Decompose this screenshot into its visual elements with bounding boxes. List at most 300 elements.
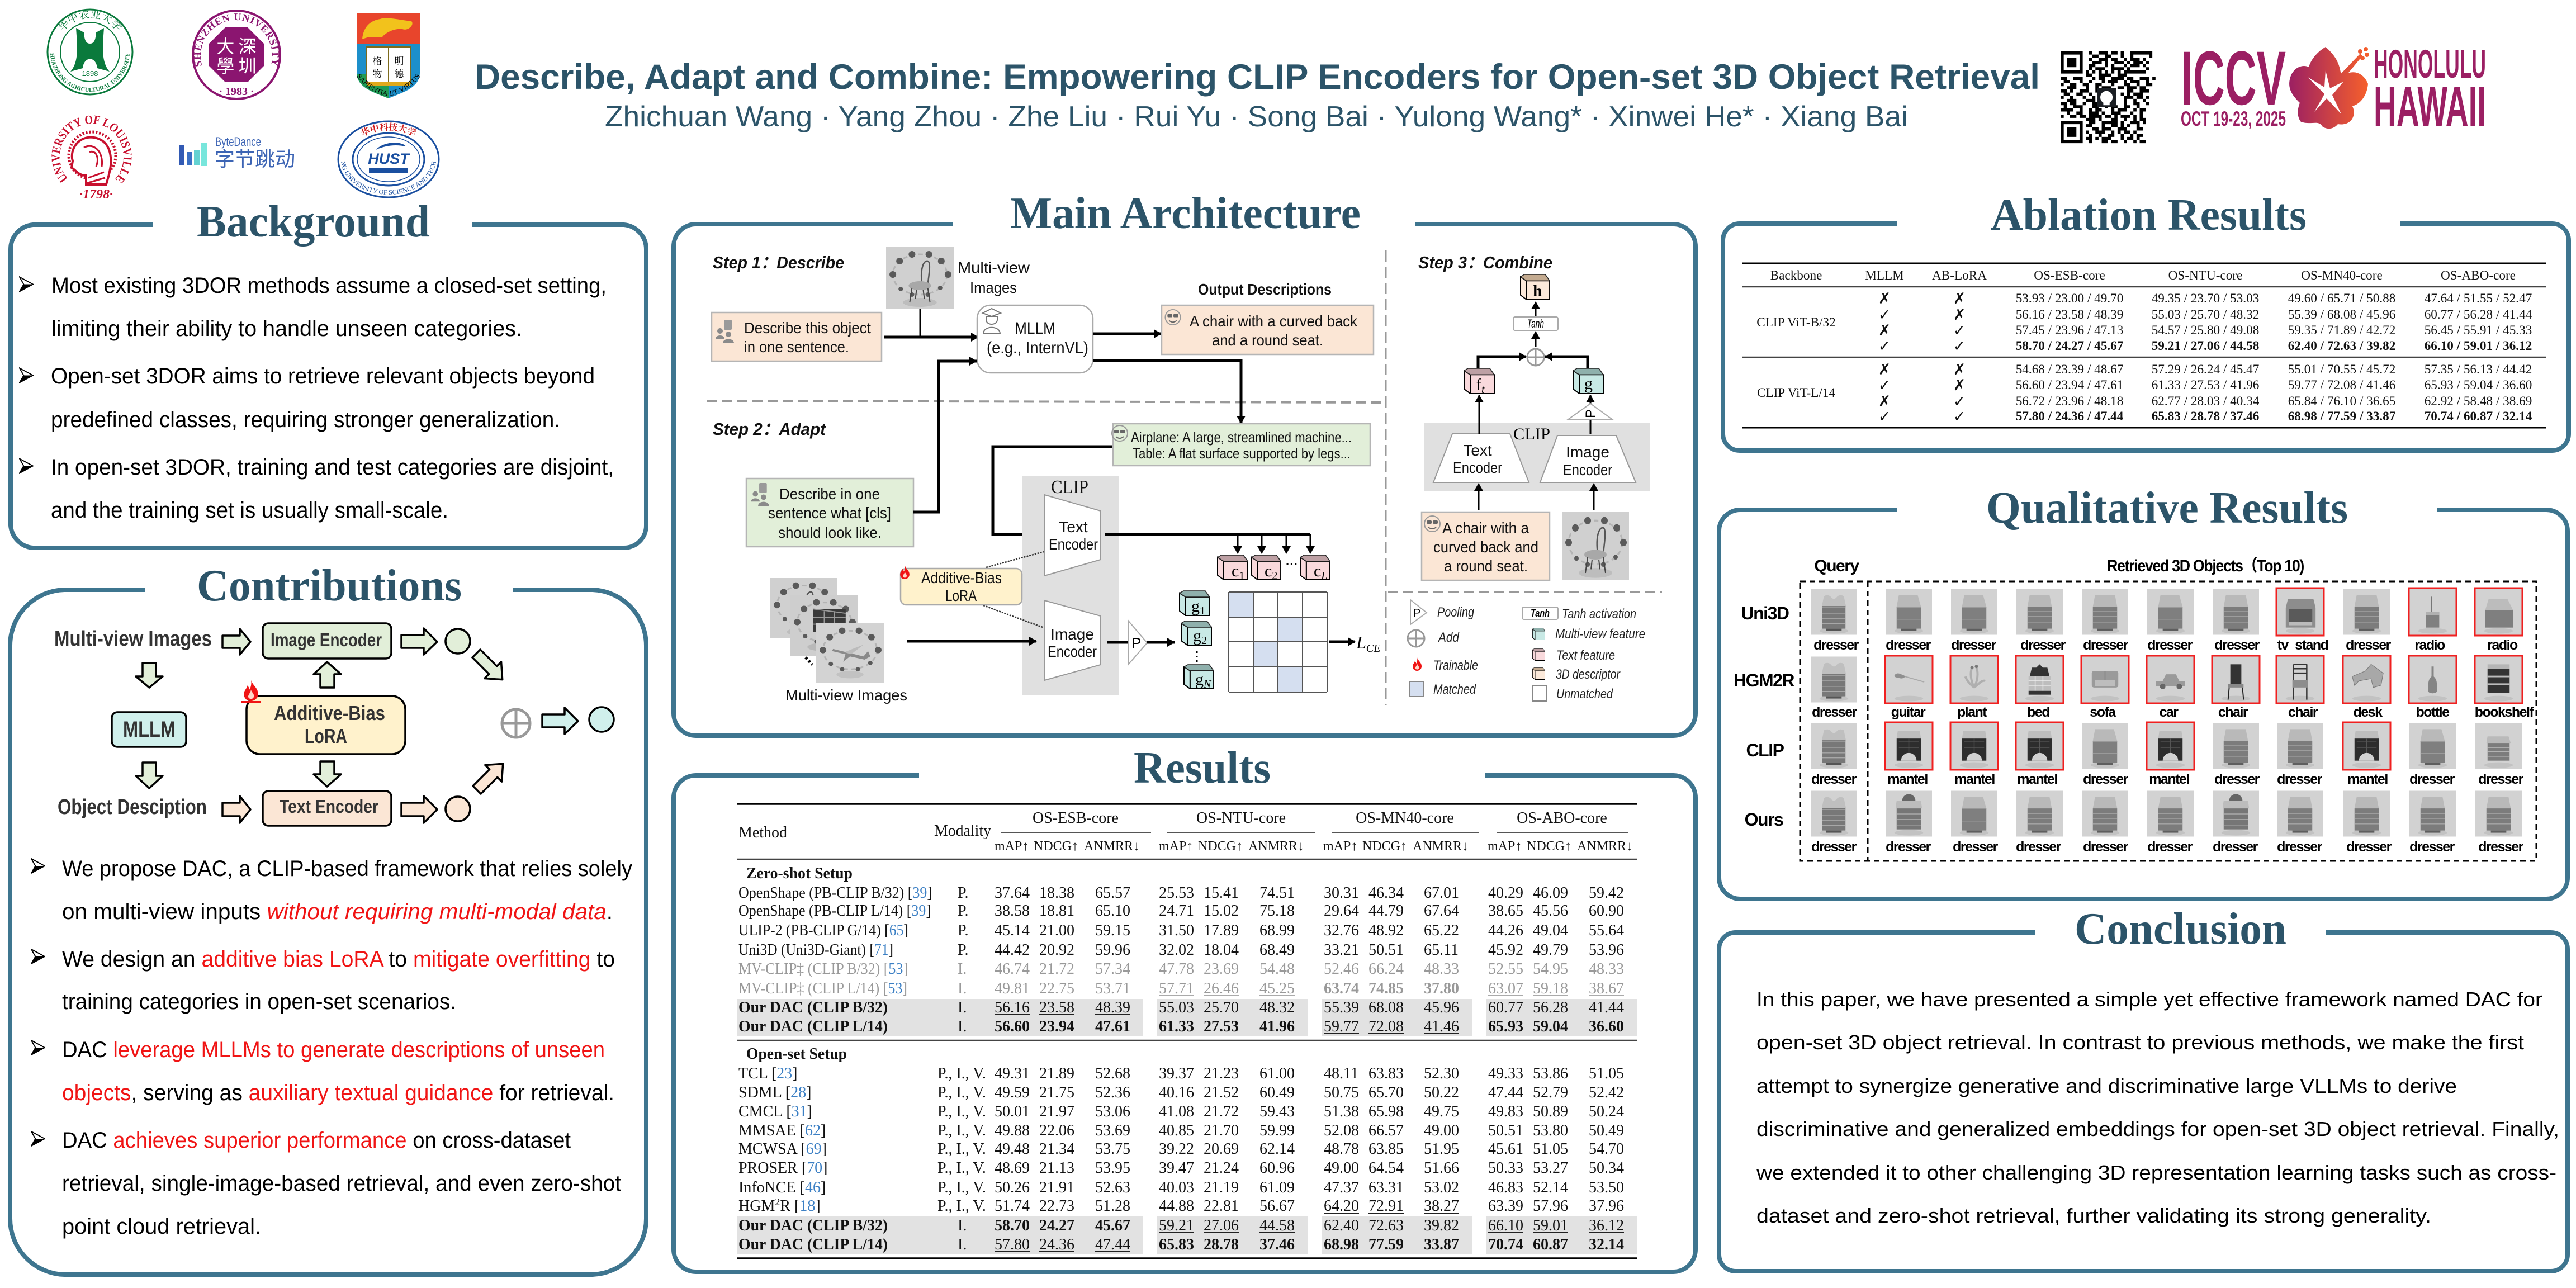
table section: zero-shot setup: 46.34 xyxy=(1368,884,1404,902)
table section: open-set setup: 64.54 xyxy=(1368,1159,1404,1177)
table section: zero-shot setup: 38.65 xyxy=(1488,902,1523,920)
table section: zero-shot setup: I. xyxy=(958,960,967,978)
box: description: A chair with a xyxy=(1442,519,1529,537)
table section: open-set setup: 53.02 xyxy=(1424,1179,1459,1196)
step 3: combine: Step 3：Combine xyxy=(1418,253,1552,272)
table section: zero-shot setup: 48.39 xyxy=(1095,999,1130,1016)
row: Ours: dresser xyxy=(2083,839,2129,855)
table section: open-set setup: 21.70 xyxy=(1204,1122,1239,1139)
table section: zero-shot setup: 63.07 xyxy=(1488,980,1523,997)
step 1: describe xyxy=(712,247,1374,423)
table section: open-set setup: 50.33 xyxy=(1488,1159,1523,1177)
row: HGM2R: dresser xyxy=(1812,704,1858,720)
text block: contribution 4 xyxy=(31,1128,621,1239)
table section: open-set setup: 20.69 xyxy=(1204,1140,1239,1158)
table section: open-set setup: 72.63 xyxy=(1368,1217,1404,1234)
table section: open-set setup: P., I., V. xyxy=(937,1197,986,1215)
table section: open-set setup: 21.97 xyxy=(1039,1103,1074,1120)
table: ablation: 57.29 / 26.24 / 45.47 xyxy=(2152,362,2259,377)
table: ablation: 59.35 / 71.89 / 42.72 xyxy=(2288,323,2395,338)
table section: open-set setup: 62.14 xyxy=(1259,1140,1295,1158)
table section: open-set setup: Our DAC (CLIP B/32) xyxy=(738,1217,888,1234)
legend: Trainable xyxy=(1433,658,1478,673)
table section: open-set setup: 59.01 xyxy=(1533,1217,1568,1234)
row: HGM2R: chair xyxy=(2218,704,2248,720)
table section: open-set setup: 52.63 xyxy=(1095,1179,1130,1196)
cubes: image features g xyxy=(1180,591,1214,690)
table section: zero-shot setup: 45.14 xyxy=(995,922,1030,939)
table header: ANMRR↓ xyxy=(1577,839,1633,854)
legend: Pooling xyxy=(1437,605,1475,620)
table section: open-set setup: 50.49 xyxy=(1589,1122,1624,1139)
figure: retrieval grid: Retrieved 3D Objects（Top 10) xyxy=(2107,557,2304,575)
table section: open-set setup: 48.69 xyxy=(995,1159,1030,1177)
table: ablation: 54.57 / 25.80 / 49.08 xyxy=(2152,323,2259,338)
row: Uni3D: dresser xyxy=(1813,637,1859,653)
cubes: image features g: g xyxy=(1191,597,1200,615)
box: CLIP xyxy=(1424,423,1650,491)
text block: contribution 3: DAC leverage MLLMs to generate descriptions of unseen xyxy=(62,1038,605,1062)
table section: open-set setup: 53.50 xyxy=(1589,1179,1624,1196)
table: ablation: ✓ xyxy=(1878,377,1891,394)
table: ablation: 57.35 / 56.13 / 44.42 xyxy=(2425,362,2532,377)
table section: zero-shot setup: I. xyxy=(958,1018,967,1035)
logo: Shenzhen University: SHENZHEN UNIVERSITY xyxy=(194,13,279,67)
image: multi-view stack: Multi-view Images xyxy=(785,686,907,704)
table section: open-set setup: R [ xyxy=(780,1197,799,1215)
row: Ours: dresser xyxy=(2213,839,2258,855)
table section: zero-shot setup: 59.15 xyxy=(1095,922,1130,939)
table: ablation: 56.72 / 23.96 / 48.18 xyxy=(2016,394,2123,409)
table section: zero-shot setup: 68.99 xyxy=(1259,922,1295,939)
box: CLIP: Encoder xyxy=(1563,461,1612,479)
box: class prompt: sentence what [cls] xyxy=(768,504,891,522)
table section: open-set setup: 45.61 xyxy=(1488,1140,1523,1158)
box: CLIP encoders xyxy=(1022,476,1119,695)
table section: open-set setup: P., I., V. xyxy=(937,1179,986,1196)
table section: zero-shot setup: 56.60 xyxy=(995,1018,1030,1035)
panel: Ablation Results xyxy=(1723,191,2569,451)
table section: open-set setup: 40.85 xyxy=(1159,1122,1194,1139)
table header: NDCG↑ xyxy=(1198,839,1243,854)
table section: open-set setup: 50.34 xyxy=(1589,1159,1624,1177)
table section: open-set setup: 18] xyxy=(799,1197,821,1215)
box: CLIP encoders: Text xyxy=(1059,518,1088,536)
table: ablation: 65.93 / 59.04 / 36.60 xyxy=(2425,378,2532,392)
table section: open-set setup: 22.81 xyxy=(1204,1197,1239,1215)
row: HGM2R: plant xyxy=(1957,704,1987,720)
text block: bullet 1: Most existing 3DOR methods assume a closed-set setting, xyxy=(51,273,607,298)
image: multi-view stack xyxy=(770,578,907,704)
row: HGM2R: car xyxy=(2159,704,2179,720)
table: ablation: OS-ESB-core xyxy=(2034,268,2105,283)
step 2: adapt: Step 2：Adapt xyxy=(713,419,827,439)
table: ablation: ✗ xyxy=(1953,377,1966,394)
matrix: similarity grid xyxy=(1229,592,1327,692)
dashed separators xyxy=(707,401,1383,402)
logo: ByteDance: 字节跳动 xyxy=(215,148,295,171)
table section: open-set setup: 47.44 xyxy=(1488,1084,1523,1101)
table section: zero-shot setup: 33.21 xyxy=(1324,941,1359,959)
table section: zero-shot setup: 49.81 xyxy=(995,980,1030,997)
table header: OS-ABO-core xyxy=(1517,809,1607,827)
text block: contribution 2 xyxy=(31,947,615,1014)
table section: zero-shot setup: 44.26 xyxy=(1488,922,1523,939)
text block: contribution 2: training categories in open-set scenarios. xyxy=(62,989,456,1014)
table section: open-set setup: 21.34 xyxy=(1039,1140,1074,1158)
table section: zero-shot setup: MV-CLIP‡ (CLIP L/14) [53] xyxy=(738,980,907,997)
table section: zero-shot setup: 67.64 xyxy=(1424,902,1459,920)
row: CLIP: dresser xyxy=(2214,771,2260,787)
row: Ours xyxy=(1811,790,2524,855)
table section: zero-shot setup: 68.08 xyxy=(1368,999,1404,1016)
table section: open-set setup: CMCL [31] xyxy=(738,1103,812,1120)
table section: zero-shot setup: 26.46 xyxy=(1204,980,1239,997)
diagram: contribution pipeline: LoRA xyxy=(305,724,347,747)
table section: zero-shot setup: 41.46 xyxy=(1424,1018,1459,1035)
legend: Matched xyxy=(1433,682,1476,697)
table section: open-set setup: 50.01 xyxy=(995,1103,1030,1120)
label: cross-entropy loss: L xyxy=(1356,632,1366,652)
table: results xyxy=(737,804,1637,1258)
table section: open-set setup: 63.31 xyxy=(1368,1179,1404,1196)
table section: open-set setup: Open-set Setup xyxy=(746,1045,847,1063)
table section: open-set setup: 72.91 xyxy=(1368,1197,1404,1215)
logo: Shenzhen University: · 1983 · xyxy=(219,86,254,98)
table section: open-set setup: 51.28 xyxy=(1095,1197,1130,1215)
table section: open-set setup: I. xyxy=(958,1217,967,1234)
table section: open-set setup: 53.69 xyxy=(1095,1122,1130,1139)
cubes: image features g: g xyxy=(1193,627,1201,645)
box: Tanh: Tanh xyxy=(1527,318,1544,330)
table section: open-set setup: 48.11 xyxy=(1324,1065,1358,1082)
table section: open-set setup: 39.22 xyxy=(1159,1140,1194,1158)
table: ablation: 54.68 / 23.39 / 48.67 xyxy=(2016,362,2123,377)
table section: open-set setup: 65.70 xyxy=(1368,1084,1404,1101)
table section: open-set setup: 33.87 xyxy=(1424,1236,1459,1253)
table section: zero-shot setup: 65.22 xyxy=(1424,922,1459,939)
table section: zero-shot setup: 54.48 xyxy=(1259,960,1295,978)
row: HGM2R: bottle xyxy=(2416,704,2450,720)
box: MLLM xyxy=(977,305,1093,373)
box: CLIP encoders: CLIP xyxy=(1051,477,1088,498)
row: Uni3D: dresser xyxy=(2214,637,2260,653)
panel: Conclusion xyxy=(1719,905,2568,1271)
table: ablation: ✓ xyxy=(1953,393,1966,410)
logo: University of Louisville: UNIVERSITY OF LOUISVILLE xyxy=(51,115,132,183)
legend xyxy=(1408,600,1645,702)
table: ablation: ✗ xyxy=(1953,290,1966,307)
table section: open-set setup: 27.06 xyxy=(1204,1217,1239,1234)
table: ablation: ✗ xyxy=(1878,393,1891,410)
table section: open-set setup: 66.57 xyxy=(1368,1122,1404,1139)
table: ablation: ✓ xyxy=(1878,408,1891,425)
table: ablation: 59.21 / 27.06 / 44.58 xyxy=(2152,339,2259,353)
table header: NDCG↑ xyxy=(1527,839,1571,854)
table section: open-set setup: 52.79 xyxy=(1533,1084,1568,1101)
table section: open-set setup: 44.88 xyxy=(1159,1197,1194,1215)
table section: open-set setup: 50.51 xyxy=(1488,1122,1523,1139)
table section: open-set setup: P., I., V. xyxy=(937,1122,986,1139)
table section: open-set setup: 59.21 xyxy=(1159,1217,1194,1234)
logo: ICCV Honolulu Hawaii xyxy=(2181,36,2486,138)
table section: open-set setup: 50.89 xyxy=(1533,1103,1568,1120)
table: ablation: 62.92 / 58.48 / 38.69 xyxy=(2425,394,2532,409)
cubes: text features c: c xyxy=(1314,562,1321,580)
table section: zero-shot setup: 60.77 xyxy=(1488,999,1523,1016)
logo: ICCV Honolulu Hawaii: ICCV xyxy=(2181,36,2286,121)
table: ablation: ✓ xyxy=(1953,322,1966,339)
table section: zero-shot setup: 22.75 xyxy=(1039,980,1074,997)
table section: open-set setup: MMSAE [62] xyxy=(738,1122,826,1139)
cube: f_t: f xyxy=(1476,376,1481,394)
table: ablation: ✗ xyxy=(1878,322,1891,339)
row: HGM2R xyxy=(1811,656,2534,720)
table section: zero-shot setup: 52.55 xyxy=(1488,960,1523,978)
logo: ByteDance: ByteDance xyxy=(215,135,261,149)
table section: open-set setup: 52.68 xyxy=(1095,1065,1130,1082)
table section: open-set setup: P., I., V. xyxy=(937,1159,986,1177)
table header: Method xyxy=(738,824,787,841)
table: ablation: Backbone xyxy=(1770,268,1822,283)
table section: zero-shot setup: 38.67 xyxy=(1589,980,1624,997)
table header: ANMRR↓ xyxy=(1413,839,1469,854)
box: describe prompt: Describe this object xyxy=(744,319,871,337)
box: class descriptions xyxy=(1112,424,1370,466)
step 1: describe: Images xyxy=(970,279,1017,296)
table section: open-set setup: 51.95 xyxy=(1424,1140,1459,1158)
table header: mAP↑ xyxy=(1323,839,1357,854)
panel: Main Architecture xyxy=(674,189,1696,736)
label: cross-entropy loss: CE xyxy=(1366,642,1380,655)
row: Uni3D: dresser xyxy=(2346,637,2392,653)
table section: open-set setup: 49.88 xyxy=(995,1122,1030,1139)
table section: zero-shot setup: 47.61 xyxy=(1095,1018,1130,1035)
row: CLIP: mantel xyxy=(1954,771,1995,787)
table section: zero-shot setup: 61.33 xyxy=(1159,1018,1194,1035)
table section: open-set setup: 21.91 xyxy=(1039,1179,1074,1196)
table section: open-set setup: 49.00 xyxy=(1424,1122,1459,1139)
table header: ANMRR↓ xyxy=(1248,839,1304,854)
table: ablation: 55.01 / 70.55 / 45.72 xyxy=(2288,362,2395,377)
logo: Huazhong Agricultural University: HUAZHONG AGRICULTURAL UNIVERSITY xyxy=(50,53,130,92)
table section: zero-shot setup: 45.56 xyxy=(1533,902,1568,920)
table section: zero-shot setup: 41.44 xyxy=(1589,999,1624,1016)
table: ablation: OS-NTU-core xyxy=(2168,268,2242,283)
logo: Huazhong Agricultural University: 1898 xyxy=(82,69,98,78)
text block: contribution 1: on multi-view inputs without requiring multi-modal data. xyxy=(62,899,613,924)
text block: contribution 3 xyxy=(31,1038,614,1105)
table section: open-set setup: 68.98 xyxy=(1324,1236,1359,1253)
table section: zero-shot setup: P. xyxy=(958,922,968,939)
cube: f_t: t xyxy=(1481,383,1485,396)
table section: open-set setup: 40.03 xyxy=(1159,1179,1194,1196)
table section: open-set setup: 63.85 xyxy=(1368,1140,1404,1158)
table section: open-set setup: 48.78 xyxy=(1324,1140,1359,1158)
table section: open-set setup: 62.40 xyxy=(1324,1217,1359,1234)
text block: contribution 4: retrieval, single-image-based retrieval, and even zero-shot xyxy=(62,1171,621,1196)
table section: open-set setup: 21.89 xyxy=(1039,1065,1074,1082)
panel: Results xyxy=(674,744,1696,1272)
legend: Add xyxy=(1437,630,1460,645)
table section: zero-shot setup: 41.96 xyxy=(1259,1018,1295,1035)
table section: zero-shot setup: OpenShape (PB-CLIP B/32) [39] xyxy=(738,884,932,902)
table header: mAP↑ xyxy=(995,839,1029,854)
table section: zero-shot setup: 25.53 xyxy=(1159,884,1194,902)
table section: zero-shot setup: 32.76 xyxy=(1324,922,1359,939)
heading: Main Architecture: Main Architecture xyxy=(1010,189,1361,238)
table header: NDCG↑ xyxy=(1034,839,1078,854)
table section: open-set setup: 21.75 xyxy=(1039,1084,1074,1101)
table section: open-set setup: 51.05 xyxy=(1533,1140,1568,1158)
table section: open-set setup: Our DAC (CLIP L/14) xyxy=(738,1236,888,1253)
row: HGM2R: desk xyxy=(2354,704,2383,720)
table section: open-set setup: 53.75 xyxy=(1095,1140,1130,1158)
logo: University of Hong Kong: 物 xyxy=(372,66,382,80)
table: ablation: OS-MN40-core xyxy=(2301,268,2383,283)
step 3: combine xyxy=(1418,253,1650,580)
text block: contribution 1 xyxy=(31,856,632,924)
text block: contribution 4: DAC achieves superior performance on cross-dataset xyxy=(62,1128,571,1153)
box: CLIP encoders: Encoder xyxy=(1049,536,1098,553)
table section: zero-shot setup: Our DAC (CLIP B/32) xyxy=(738,999,888,1016)
figure: retrieval grid xyxy=(1734,557,2536,861)
table: ablation: ✗ xyxy=(1878,290,1891,307)
icon: hibiscus flower xyxy=(2289,47,2369,129)
table section: open-set setup: 39.47 xyxy=(1159,1159,1194,1177)
table section: open-set setup: 54.70 xyxy=(1589,1140,1624,1158)
table section: zero-shot setup: OpenShape (PB-CLIP L/14) [39] xyxy=(738,902,931,920)
table section: open-set setup: 44.58 xyxy=(1259,1217,1295,1234)
table section: open-set setup: 53.80 xyxy=(1533,1122,1568,1139)
table section: open-set setup: 39.82 xyxy=(1424,1217,1459,1234)
table section: open-set setup: 53.86 xyxy=(1533,1065,1568,1082)
table section: zero-shot setup: 74.51 xyxy=(1259,884,1295,902)
panel: Contributions xyxy=(10,561,646,1275)
cube: g: g xyxy=(1584,375,1593,393)
logo: Huazhong University of Science and Technology: 华中科技大学 xyxy=(361,122,416,136)
table section: zero-shot setup: 55.39 xyxy=(1324,999,1359,1016)
table section: zero-shot setup: 74.85 xyxy=(1368,980,1404,997)
box: describe prompt: in one sentence. xyxy=(744,338,849,356)
table section: zero-shot setup: 49.79 xyxy=(1533,941,1568,959)
table: ablation: 57.80 / 24.36 / 47.44 xyxy=(2016,409,2124,424)
row: Uni3D: dresser xyxy=(2083,637,2129,653)
table section: zero-shot setup: P. xyxy=(958,941,968,959)
table section: open-set setup: 51.66 xyxy=(1424,1159,1459,1177)
table section: zero-shot setup: 53.96 xyxy=(1589,941,1624,959)
table section: open-set setup: HGM xyxy=(738,1197,775,1215)
text block: conclusion: discriminative and generalized embeddings for open-set 3D object retrieval. Finally, xyxy=(1756,1117,2559,1140)
text block: contribution 2: We design an additive bias LoRA to mitigate overfitting to xyxy=(62,947,615,972)
table section: open-set setup: 47.37 xyxy=(1324,1179,1359,1196)
legend: Tanh activation xyxy=(1562,607,1636,622)
table section: zero-shot setup: 44.79 xyxy=(1368,902,1404,920)
table section: zero-shot setup: 52.46 xyxy=(1324,960,1359,978)
table section: zero-shot setup: 17.89 xyxy=(1204,922,1239,939)
legend: Tanh xyxy=(1531,608,1550,619)
figure: retrieval grid: Query xyxy=(1814,557,1859,575)
table section: zero-shot setup: 23.94 xyxy=(1039,1018,1074,1035)
table section: zero-shot setup: 48.92 xyxy=(1368,922,1404,939)
table section: open-set setup: 59.99 xyxy=(1259,1122,1295,1139)
table section: zero-shot setup: 65.11 xyxy=(1424,941,1459,959)
table section: zero-shot setup: 29.64 xyxy=(1324,902,1359,920)
table header: NDCG↑ xyxy=(1362,839,1407,854)
table section: open-set setup: 58.70 xyxy=(995,1217,1030,1234)
legend: Text feature xyxy=(1556,648,1615,663)
table header: ANMRR↓ xyxy=(1084,839,1140,854)
table section: zero-shot setup: 30.31 xyxy=(1324,884,1359,902)
table section: zero-shot setup: 18.38 xyxy=(1039,884,1074,902)
row: HGM2R: bookshelf xyxy=(2475,704,2534,720)
table section: zero-shot setup: 46.09 xyxy=(1533,884,1568,902)
table section: open-set setup: 51.38 xyxy=(1324,1103,1359,1120)
table: ablation xyxy=(1742,263,2546,428)
table section: open-set setup: 63.83 xyxy=(1368,1065,1404,1082)
table section: open-set setup: 63.39 xyxy=(1488,1197,1523,1215)
logo: University of Hong Kong xyxy=(357,13,420,98)
row: CLIP: mantel xyxy=(2017,771,2057,787)
text block: bullet 3: and the training set is usually small-scale. xyxy=(51,498,448,523)
box: additive-bias LoRA: Additive-Bias xyxy=(921,569,1002,586)
diagram: contribution pipeline xyxy=(54,623,614,826)
table section: zero-shot setup: I. xyxy=(958,999,967,1016)
table: ablation: 49.35 / 23.70 / 53.03 xyxy=(2152,291,2259,306)
box: CLIP encoders: Image xyxy=(1050,626,1094,643)
logo: Huazhong University of Science and Technology: HUST xyxy=(368,150,410,167)
table section: zero-shot setup: 56.28 xyxy=(1533,999,1568,1016)
table header: mAP↑ xyxy=(1159,839,1193,854)
table: ablation: 68.98 / 77.59 / 33.87 xyxy=(2288,409,2396,424)
table section: zero-shot setup: 65.10 xyxy=(1095,902,1130,920)
table section: zero-shot setup: 49.04 xyxy=(1533,922,1568,939)
row: Ours: dresser xyxy=(2277,839,2323,855)
row: Ours: dresser xyxy=(2478,839,2524,855)
table section: open-set setup: 22.73 xyxy=(1039,1197,1074,1215)
table section: zero-shot setup: P. xyxy=(958,902,968,920)
row: Uni3D: dresser xyxy=(1951,637,1997,653)
row: HGM2R: chair xyxy=(2288,704,2318,720)
step 3: combine: P xyxy=(1583,409,1598,418)
figure: retrieval grid: Ours xyxy=(1745,809,1783,830)
cubes: text features c: c xyxy=(1232,562,1239,580)
row: Ours: dresser xyxy=(2016,839,2062,855)
table section: open-set setup: 37.96 xyxy=(1589,1197,1624,1215)
heading: Conclusion: Conclusion xyxy=(2075,905,2286,954)
text block: bullet 3: In open-set 3DOR, training and test categories are disjoint, xyxy=(51,455,614,480)
table section: open-set setup: P., I., V. xyxy=(937,1103,986,1120)
table section: zero-shot setup: 23.69 xyxy=(1204,960,1239,978)
row: Uni3D: radio xyxy=(2414,637,2445,653)
table section: open-set setup: 45.67 xyxy=(1095,1217,1130,1234)
QR code xyxy=(2061,53,2156,141)
table section: open-set setup: 21.72 xyxy=(1204,1103,1239,1120)
table section: open-set setup: 22.06 xyxy=(1039,1122,1074,1139)
table section: open-set setup: 49.59 xyxy=(995,1084,1030,1101)
row: Ours: dresser xyxy=(2147,839,2193,855)
box: class prompt: should look like. xyxy=(778,524,882,541)
table section: zero-shot setup: 32.02 xyxy=(1159,941,1194,959)
logo: ByteDance xyxy=(179,135,295,171)
table section: open-set setup: 28.78 xyxy=(1204,1236,1239,1253)
table section: open-set setup: TCL [23] xyxy=(738,1065,797,1082)
table: ablation: 56.16 / 23.58 / 48.39 xyxy=(2016,307,2123,322)
logo: Shenzhen University xyxy=(192,10,281,100)
table section: zero-shot setup: 59.77 xyxy=(1324,1018,1359,1035)
table section: zero-shot setup: ULIP-2 (PB-CLIP G/14) [65] xyxy=(738,922,908,939)
table section: open-set setup: 49.48 xyxy=(995,1140,1030,1158)
